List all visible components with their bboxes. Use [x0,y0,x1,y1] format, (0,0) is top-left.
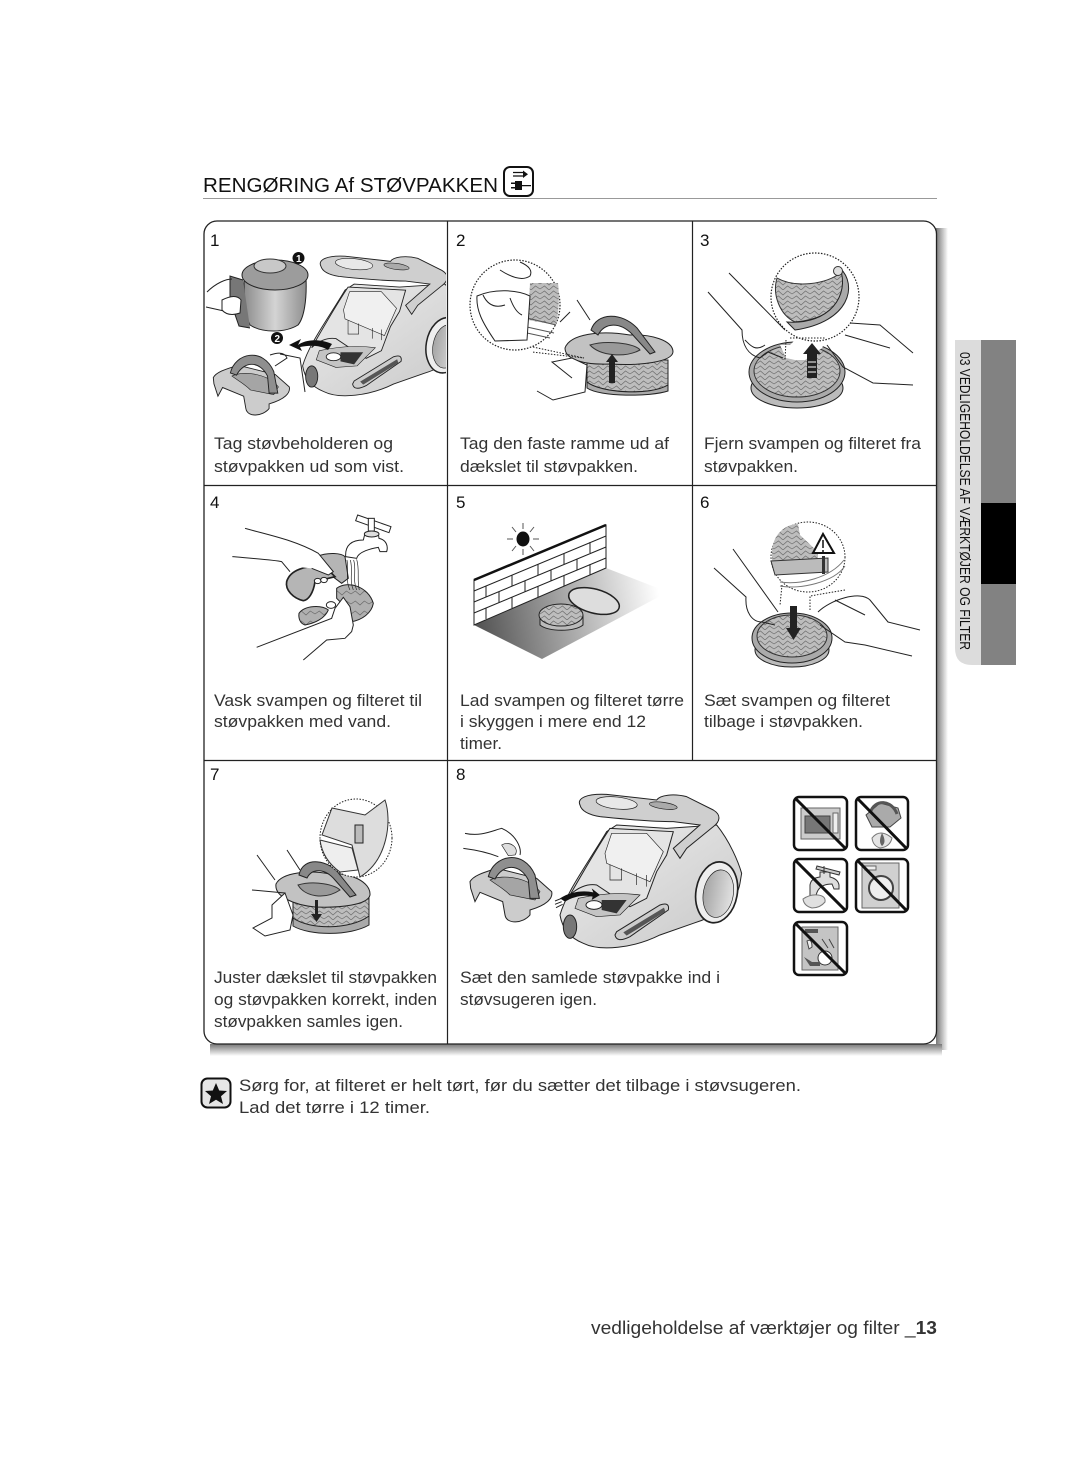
badge: 2 [271,332,283,345]
step 5: illustration [474,523,668,659]
step 1: caption line 2: støvpakken ud som vist. [214,457,404,476]
icon: no oven [794,797,847,850]
step 4: caption line 2: støvpakken med vand. [214,712,391,731]
step 2: heading number: 2 [456,231,465,250]
step 3: caption: Fjern svampen og filteret fra [704,434,922,453]
note text: Sørg for, at filteret er helt tørt, før du sætter det tilbage i støvsugeren. [239,1076,801,1095]
step 1: illustration [206,252,468,415]
panel: instruction grid [204,221,948,1056]
step 1: heading number: 1 [210,231,219,250]
step 6: illustration [714,522,920,667]
step 5: caption line 2: i skyggen i mere end 12 [460,712,646,731]
badge: 1 [292,252,304,265]
step 4: heading number: 4 [210,493,219,512]
icon: no flame [856,797,908,850]
icon: no water [794,859,847,912]
step 3: illustration [708,253,913,408]
step 7: caption line 2: og støvpakken korrekt, inden [214,990,437,1009]
title: RENGØRING Af STØVPAKKEN [203,175,498,197]
step 8: caption: Sæt den samlede støvpakke ind i [460,968,720,987]
sidebar label: 03 VEDLIGEHOLDELSE AF VÆRKTØJER OG FILTER [956,352,973,650]
icon: unplug [504,167,533,196]
step 5: caption: Lad svampen og filteret tørre [460,691,684,710]
icon: note star [202,1078,230,1108]
badge: 2: 2 [274,334,280,345]
step 3: caption line 2: støvpakken. [704,457,798,476]
step 6: caption line 2: tilbage i støvpakken. [704,712,863,731]
step 2: caption: Tag den faste ramme ud af [460,434,669,453]
step 7: illustration [252,799,392,936]
step 6: caption: Sæt svampen og filteret [704,691,890,710]
footer page label: vedligeholdelse af værktøjer og filter _ 13 [591,1318,937,1339]
step 8: illustration [463,794,742,948]
step 4: caption: Vask svampen og filteret til [214,691,422,710]
step 5: heading number: 5 [456,493,465,512]
step 7: heading number: 7 [210,765,219,784]
badge: 1: 1 [296,254,302,265]
icon: no washing machine [856,859,908,912]
step 5: caption line 3: timer. [460,734,502,753]
step 7: caption: Juster dækslet til støvpakken [214,968,437,987]
icon: no dishwasher [794,922,847,975]
step 1: caption: Tag støvbeholderen og [214,434,393,453]
step 3: heading number: 3 [700,231,709,250]
step 2: illustration [470,260,673,400]
step 8: heading number: 8 [456,765,465,784]
step 8: caption line 2: støvsugeren igen. [460,990,597,1009]
step 7: caption line 3: støvpakken samles igen. [214,1012,403,1031]
step 6: heading number: 6 [700,493,709,512]
step 4: illustration [232,515,391,660]
note text line 2: Lad det tørre i 12 timer. [239,1098,430,1117]
sidebar tab [955,340,1016,665]
step 2: caption line 2: dækslet til støvpakken. [460,457,638,476]
